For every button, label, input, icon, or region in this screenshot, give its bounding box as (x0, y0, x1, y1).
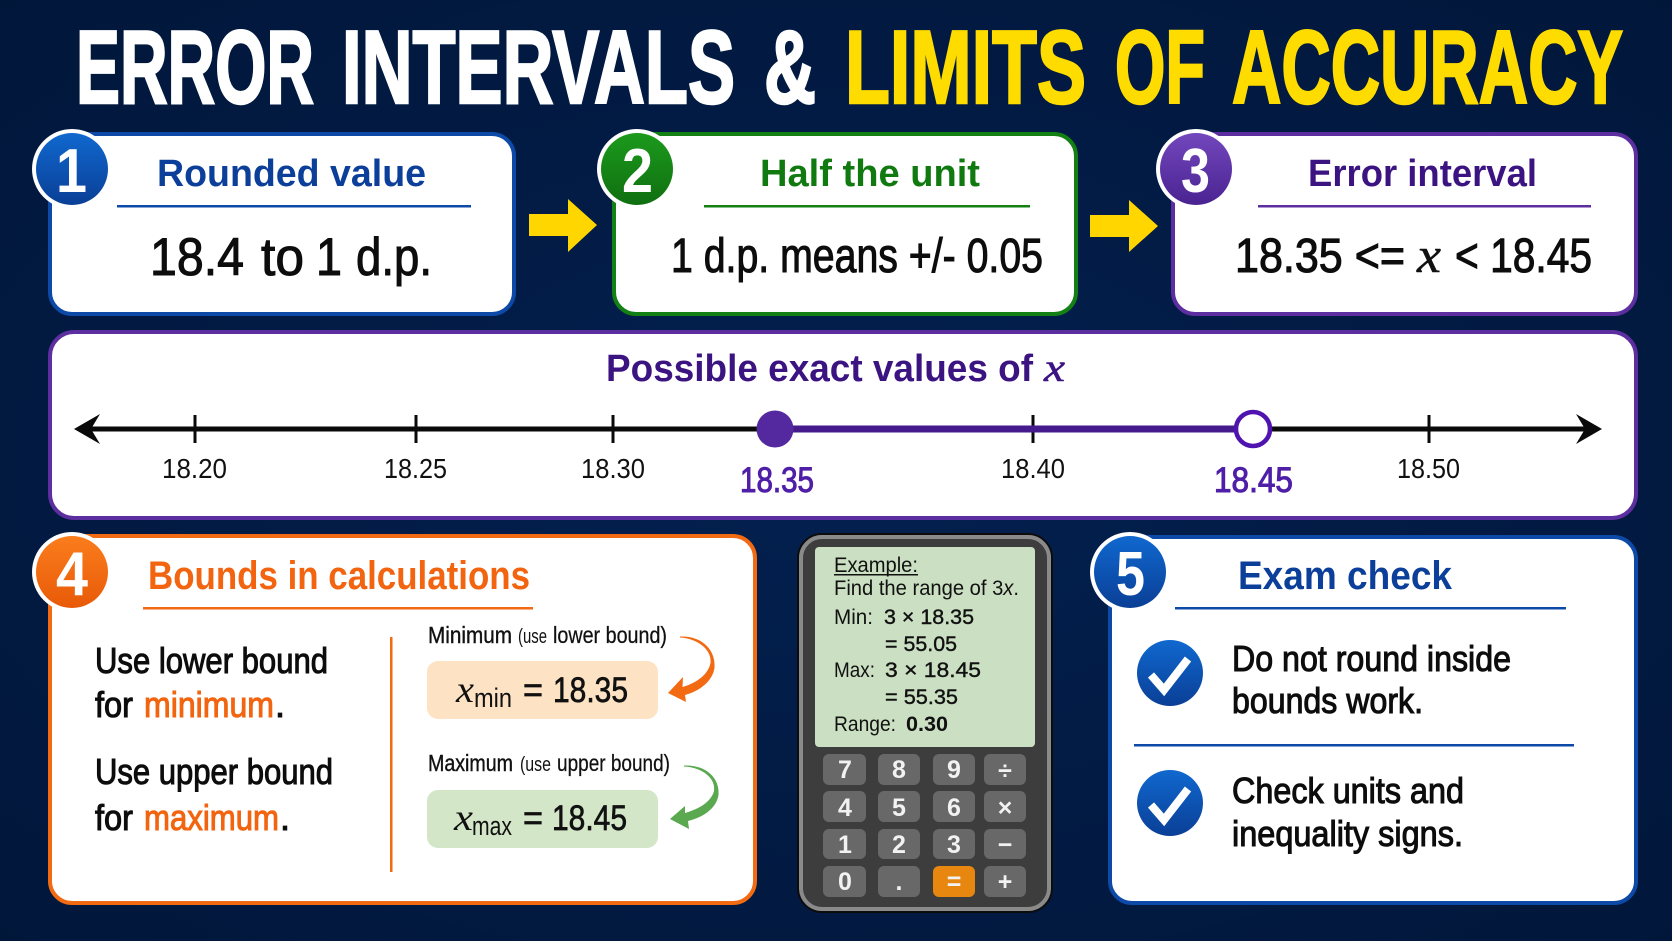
formula: x min (427, 661, 658, 719)
text: inequality: x (1416, 227, 1441, 283)
panel: bounds in calculations (32, 532, 755, 903)
title: INTERVALS (342, 10, 735, 126)
panel: number line (50, 332, 1636, 518)
badge 1: 1 (56, 137, 87, 206)
bound labels: 18.45 (1214, 461, 1293, 500)
text: 18.4 to 1 d.p.: 18.4 (150, 228, 244, 287)
formula: x min: x (455, 669, 474, 711)
calculator keys: 2 (892, 831, 906, 859)
calculator screen: 0.30 (906, 713, 948, 736)
text: upper bound for maximum: for (95, 797, 133, 838)
formula: x max: max (472, 811, 512, 841)
text: lower bound for minimum: for (95, 684, 133, 725)
calculator keys: . (896, 868, 902, 896)
calculator keys: 5 (892, 794, 906, 822)
calculator keys: × (998, 794, 1012, 822)
title: & (764, 10, 816, 126)
heading: rounded value: Rounded value (157, 153, 426, 195)
text: do not round: bounds work. (1232, 680, 1423, 721)
formula: x min: 18.35 (553, 671, 628, 710)
calculator keys: 8 (892, 756, 906, 784)
arrow: step 2 to 3 (1090, 200, 1158, 252)
calculator screen: = 55.35 (885, 686, 958, 709)
title (76, 10, 1623, 126)
icon: check 2 (1137, 770, 1203, 836)
number line axis (74, 414, 1602, 444)
formula: x min: = (523, 671, 543, 710)
text: lower bound for minimum: minimum (144, 684, 274, 725)
badge 4 (32, 532, 112, 612)
calculator screen: Find the range of 3x. (834, 577, 1019, 600)
calculator keys: = (947, 868, 961, 896)
formula: x max: x (453, 797, 473, 839)
label: minimum (428, 622, 667, 648)
tick labels: 18.25 (384, 453, 447, 484)
text: do not round (1232, 638, 1511, 721)
arrow: green (670, 765, 719, 829)
badge 2: 2 (622, 137, 653, 206)
text: do not round: Do not round inside (1232, 638, 1511, 679)
label: maximum: (use (520, 754, 551, 776)
calculator keys (823, 754, 1026, 897)
panel: exam check (1090, 532, 1636, 903)
highlighted interval (756, 410, 1270, 448)
calculator keys: 3 (947, 831, 961, 859)
badge 3 (1156, 129, 1236, 209)
text: 18.4 to 1 d.p.: 1 (316, 228, 342, 287)
heading: exam check: Exam check (1238, 554, 1453, 598)
text: lower bound for minimum: . (275, 684, 285, 725)
calculator keys: 7 (838, 756, 852, 784)
formula: x min: min (474, 683, 512, 713)
icon: check 1 (1137, 640, 1203, 706)
calculator keys: + (998, 868, 1012, 896)
calculator keys: 1 (838, 831, 852, 859)
calculator keys: 4 (838, 794, 852, 822)
label: minimum: Minimum (428, 622, 512, 648)
heading: error interval: Error interval (1308, 153, 1537, 195)
tick labels: 18.40 (1001, 453, 1065, 484)
calculator keys: 9 (947, 756, 961, 784)
badge 2 (597, 129, 677, 209)
text: inequality: 18.35 <= (1235, 230, 1405, 283)
bound labels (740, 461, 1293, 500)
badge 5 (1090, 532, 1170, 612)
calculator screen: = 55.05 (885, 633, 957, 656)
text: inequality: < 18.45 (1455, 230, 1592, 283)
title: OF (1115, 10, 1205, 126)
text: 1 d.p. means +/- 0.05: 1 d.p. means +/- 0.05 (671, 230, 1043, 283)
tick labels: 18.50 (1397, 453, 1460, 484)
text: upper bound for maximum: . (280, 797, 290, 838)
calculator screen: 3 × 18.35 (884, 606, 974, 629)
calculator keys: 0 (838, 868, 852, 896)
text: upper bound for maximum: Use upper bound (95, 751, 333, 792)
label: minimum: (use (518, 626, 547, 648)
tick labels: 18.20 (162, 453, 227, 484)
calculator keys: ÷ (998, 757, 1012, 785)
calculator screen: Max: (834, 659, 875, 682)
text: check units: inequality signs. (1232, 813, 1463, 854)
text: check units (1232, 770, 1464, 854)
calculator (798, 534, 1052, 912)
formula: x max: = (523, 799, 543, 838)
arrow: step 1 to 2 (529, 199, 597, 252)
text: inequality (1235, 227, 1592, 283)
label: maximum: upper bound) (557, 750, 670, 776)
text: 18.4 to 1 d.p. (150, 228, 432, 287)
formula: x max (427, 790, 658, 848)
calculator keys: − (998, 831, 1012, 859)
title: LIMITS (845, 10, 1086, 126)
heading: bounds in calculations: Bounds in calculations (148, 554, 530, 598)
arrow: orange (668, 636, 715, 702)
calculator screen: Example: (834, 554, 918, 577)
panel: step 1 rounded value (32, 129, 514, 314)
calculator screen: Range: (834, 713, 896, 736)
heading: half the unit: Half the unit (760, 153, 980, 195)
text: lower bound for minimum: Use lower bound (95, 640, 328, 681)
calculator keys: 6 (947, 794, 961, 822)
badge 1 (32, 129, 112, 209)
tick labels: 18.30 (581, 453, 645, 484)
panel: step 3 error interval (1156, 129, 1636, 314)
panel: step 2 half the unit (597, 129, 1076, 314)
tick labels (162, 453, 1460, 484)
text: upper bound for maximum (95, 751, 333, 838)
calculator screen: 3 × 18.45 (885, 659, 981, 682)
badge 4: 4 (56, 540, 88, 609)
text: 18.4 to 1 d.p.: d.p. (356, 228, 432, 287)
heading: possible exact values: Possible exact values of (606, 348, 1033, 390)
badge 3: 3 (1181, 137, 1210, 206)
text: upper bound for maximum: maximum (144, 797, 279, 838)
text: lower bound for minimum (95, 640, 328, 725)
label: maximum: Maximum (428, 750, 513, 776)
label: minimum: lower bound) (553, 622, 667, 648)
text: check units: Check units and (1232, 770, 1464, 811)
label: maximum (428, 750, 670, 776)
badge 5: 5 (1116, 540, 1145, 609)
bound labels: 18.35 (740, 461, 814, 500)
formula: x max: 18.45 (552, 799, 627, 838)
text: 18.4 to 1 d.p.: to (261, 228, 304, 287)
calculator screen: Min: (834, 606, 873, 629)
title: ERROR (76, 10, 314, 126)
heading: possible exact values: x (1043, 345, 1065, 390)
calculator screen (815, 547, 1035, 747)
